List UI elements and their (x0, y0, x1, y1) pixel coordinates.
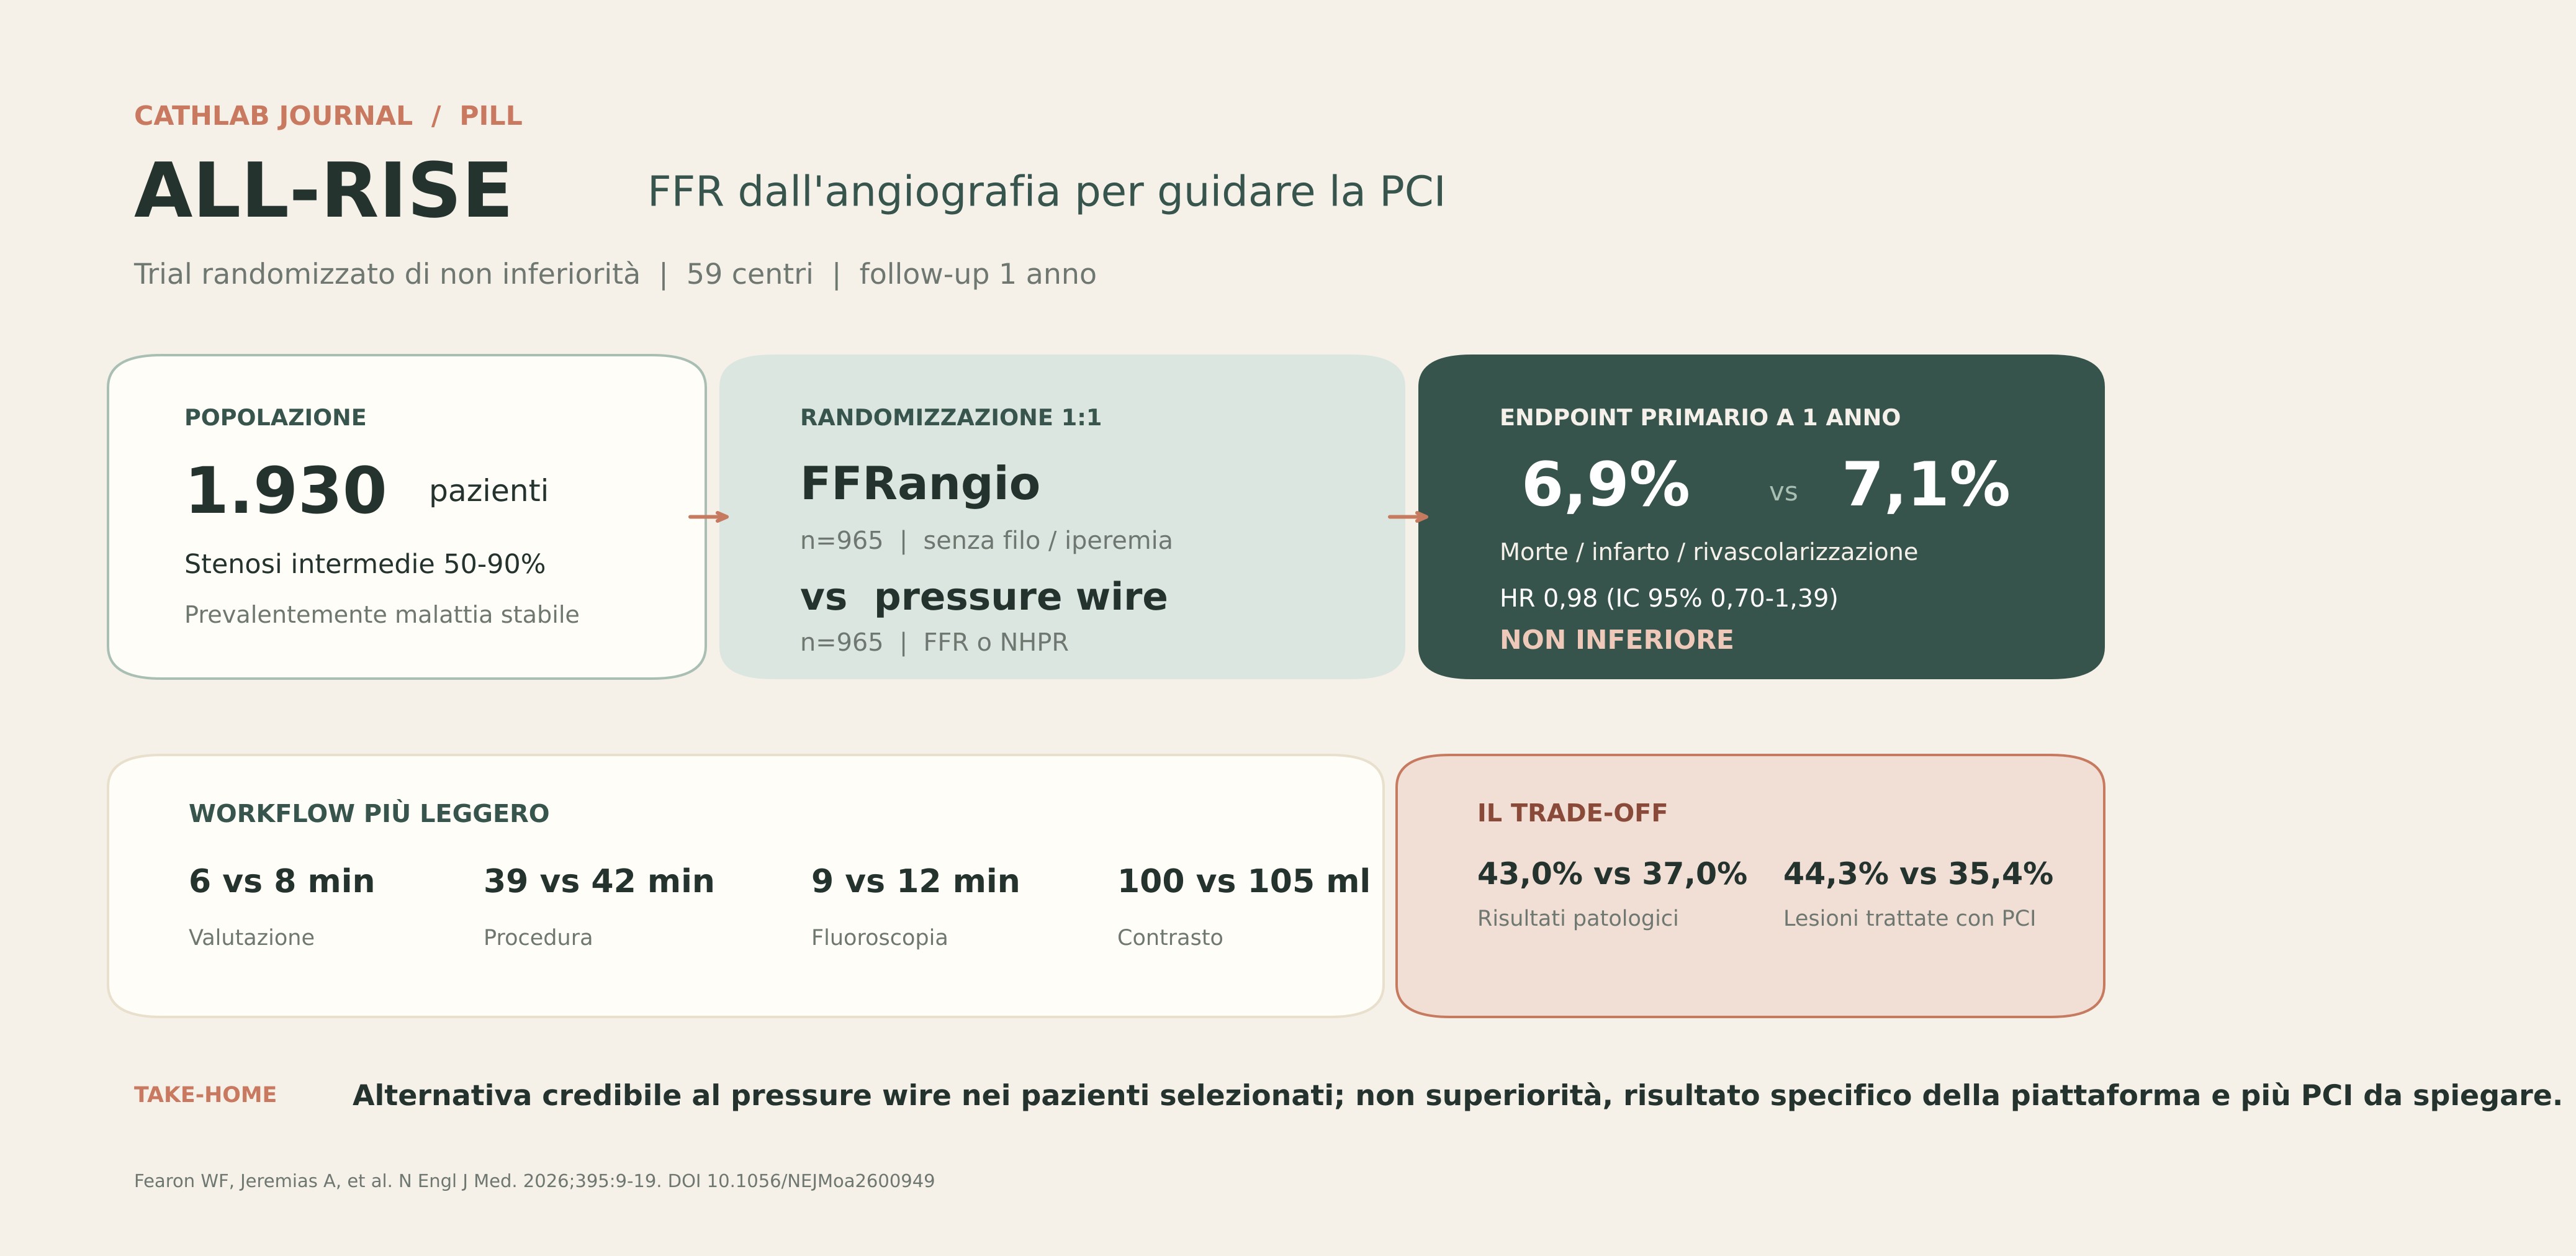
take-home message: Alternativa credibile al pressure wire nei pazienti selezionati; non superiorità, risultato specifico della piattaforma e più PCI da spiegare. (353, 1078, 2563, 1112)
randomizzazione heading: RANDOMIZZAZIONE 1:1 (800, 404, 1102, 431)
metric: procedura (484, 863, 715, 951)
arrow: randomizzazione to endpoint (1390, 513, 1426, 521)
FFRangio arm detail: n=965 | senza filo / iperemia (800, 526, 1173, 555)
subtitle: FFR dall'angiografia per guidare la PCI (647, 168, 1446, 216)
metric: lesioni trattate (1783, 856, 2053, 931)
patient unit: pazienti (429, 474, 549, 508)
panel: endpoint primario (1418, 355, 2105, 679)
panel: trade-off (1397, 755, 2104, 1017)
metric: procedura: Procedura (484, 926, 593, 951)
pressure wire arm: vs pressure wire (800, 575, 1168, 619)
panel: popolazione (108, 355, 706, 679)
metric: lesioni trattate: Lesioni trattate con PCI (1783, 906, 2036, 931)
trade-off heading: IL TRADE-OFF (1477, 799, 1669, 828)
metric: valutazione: 6 vs 8 min (189, 863, 376, 900)
panel: randomizzazione (719, 355, 1405, 679)
metric: fluoroscopia (811, 863, 1020, 951)
metric: valutazione (189, 863, 376, 951)
title: ALL-RISE (134, 147, 513, 235)
metric: valutazione: Valutazione (189, 926, 315, 951)
metric: risultati patologici: Risultati patologici (1477, 906, 1679, 931)
panel: workflow (108, 755, 1384, 1017)
stenosis description: Stenosi intermedie 50-90% (184, 549, 546, 580)
pressure wire event rate: 7,1% (1842, 450, 2011, 520)
eyebrow: CATHLAB JOURNAL / PILL (134, 101, 523, 132)
verdict: NON INFERIORE (1500, 625, 1734, 656)
metric: procedura: 39 vs 42 min (484, 863, 715, 900)
metric: contrasto: Contrasto (1117, 926, 1223, 951)
take-home (134, 1078, 2563, 1112)
endpoint heading: ENDPOINT PRIMARIO A 1 ANNO (1500, 404, 1901, 431)
patient count: 1.930 (184, 454, 387, 528)
header (133, 101, 1446, 291)
metric: fluoroscopia: 9 vs 12 min (811, 863, 1020, 900)
metric: risultati patologici: 43,0% vs 37,0% (1477, 856, 1747, 892)
citation: Fearon WF, Jeremias A, et al. N Engl J Med. 2026;395:9-19. DOI 10.1056/NEJMoa2600949 (134, 1170, 935, 1191)
metric: risultati patologici (1477, 856, 1747, 931)
FFRangio arm: FFRangio (800, 458, 1040, 510)
vs label: vs (1769, 476, 1798, 507)
popolazione heading: POPOLAZIONE (184, 404, 367, 431)
arrow: popolazione to randomizzazione (690, 513, 727, 521)
metric: contrasto: 100 vs 105 ml (1117, 863, 1371, 900)
study descriptor: Trial randomizzato di non inferiorità | 59 centri | follow-up 1 anno (133, 257, 1097, 291)
workflow heading: WORKFLOW PIÙ LEGGERO (189, 799, 550, 828)
metric: contrasto (1117, 863, 1371, 951)
take-home label: TAKE-HOME (134, 1083, 277, 1108)
FFRangio event rate: 6,9% (1521, 450, 1690, 520)
endpoint definition: Morte / infarto / rivascolarizzazione (1500, 538, 1918, 566)
pressure wire arm detail: n=965 | FFR o NHPR (800, 628, 1069, 657)
metric: lesioni trattate: 44,3% vs 35,4% (1783, 856, 2053, 892)
hazard ratio: HR 0,98 (IC 95% 0,70-1,39) (1500, 584, 1839, 613)
metric: fluoroscopia: Fluoroscopia (811, 926, 948, 951)
clinical setting: Prevalentemente malattia stabile (184, 602, 580, 629)
